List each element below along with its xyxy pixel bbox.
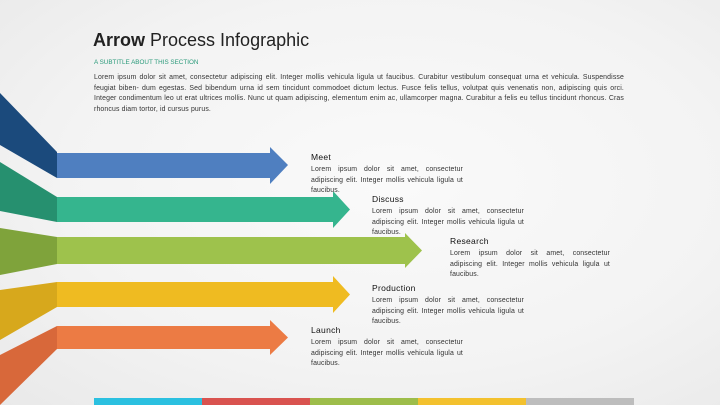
footer color bar: [94, 398, 634, 405]
step: meet: Meet: [311, 152, 331, 162]
intro paragraph: Lorem ipsum dolor sit amet, consectetur adipiscing elit. Integer mollis vehicula ligula ut faucibus. Curabitur vestibulum consequat urna et vehicula. Suspendisse feugiat biben- dum egestas. Sed bibendum urna id sem tincidunt commodoet dictum lectus. Fusce felis tellus, volutpat quis venenatis non, adipiscing quis orci. Integer condimentum leo ut erat ultrices mollis. Nunc ut quam adipiscing, elementum enim ac, ullamcorper magna. Curabitur a felis eu tellus tincidunt rhoncus. Cras rhoncus diam tortor, id cursus purus.: [94, 74, 624, 113]
arrow: meet: [0, 93, 288, 184]
step: production: [372, 283, 524, 325]
arrow: discuss: [0, 162, 350, 228]
arrow: production: [0, 276, 350, 340]
step: launch: Lorem ipsum dolor sit amet, consectetur adipiscing elit. Integer mollis vehicula ligula ut faucibus.: [311, 339, 463, 367]
step: research: Lorem ipsum dolor sit amet, consectetur adipiscing elit. Integer mollis vehicula ligula ut faucibus.: [450, 250, 610, 278]
step: meet: Lorem ipsum dolor sit amet, consectetur adipiscing elit. Integer mollis vehicula ligula ut faucibus.: [311, 166, 463, 194]
step: production: Production: [372, 283, 416, 293]
step: meet: [311, 152, 463, 194]
step: discuss: [372, 194, 524, 236]
arrow: research: [0, 228, 422, 275]
title: Arrow Process Infographic: [93, 30, 309, 50]
arrow: launch: [0, 320, 288, 405]
step: discuss: Discuss: [372, 194, 404, 204]
step: research: [450, 236, 610, 278]
step: launch: [311, 325, 463, 367]
step: production: Lorem ipsum dolor sit amet, consectetur adipiscing elit. Integer mollis vehicula ligula ut faucibus.: [372, 297, 524, 325]
step: launch: Launch: [311, 325, 341, 335]
subtitle: A SUBTITLE ABOUT THIS SECTION: [94, 59, 198, 66]
step: discuss: Lorem ipsum dolor sit amet, consectetur adipiscing elit. Integer mollis vehicula ligula ut faucibus.: [372, 208, 524, 236]
step: research: Research: [450, 236, 489, 246]
